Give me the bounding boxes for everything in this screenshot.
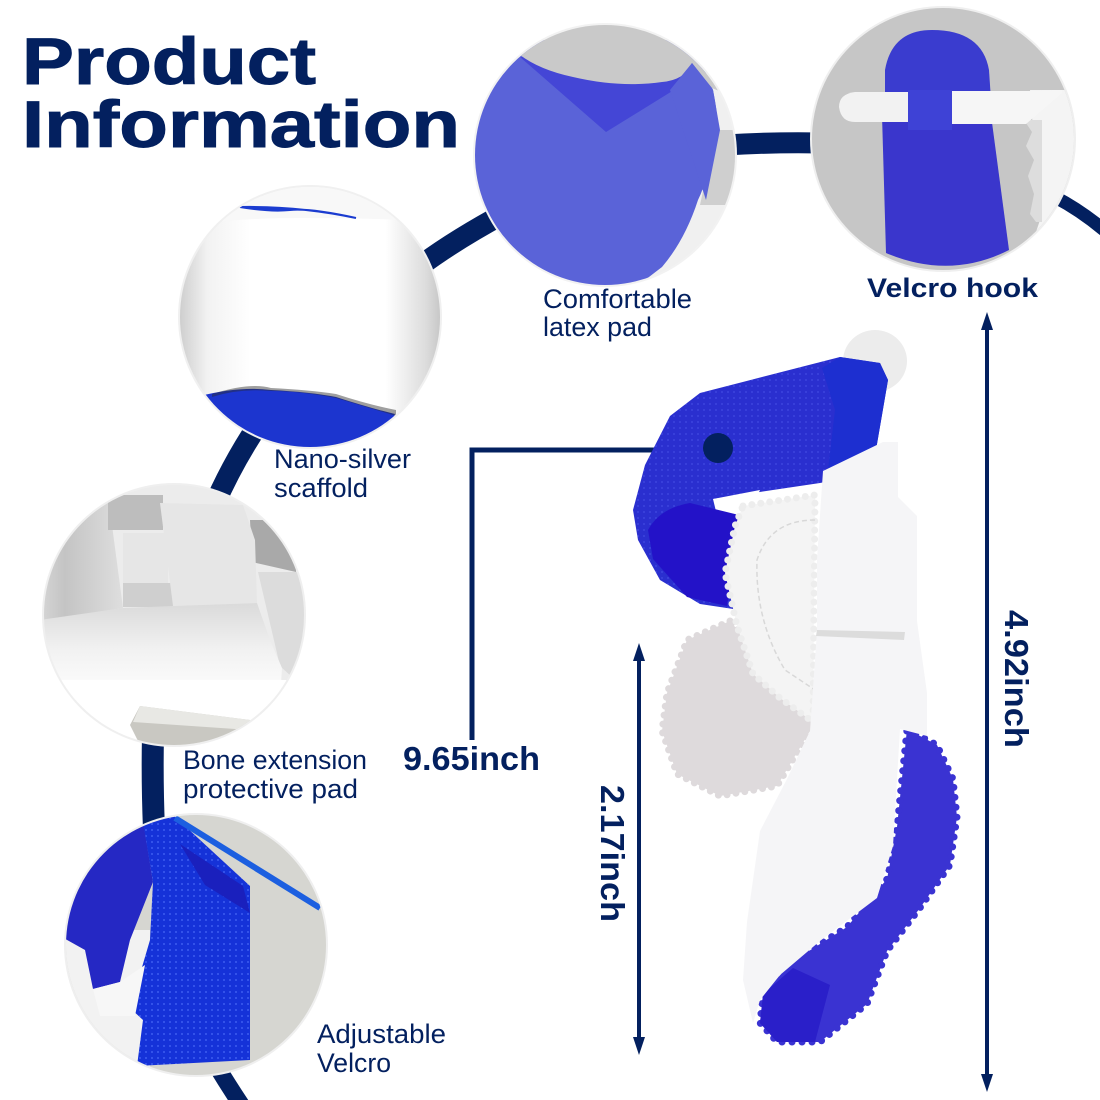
arrow: height: [633, 643, 645, 1055]
pad stitching: [757, 520, 815, 690]
title: Information: [22, 87, 460, 161]
white sliver: [713, 490, 760, 512]
label: bone extension protective pad: Bone extension: [183, 745, 367, 775]
panel: velcro hook: [805, 0, 1085, 280]
label: nano-silver scaffold: Nano-silver: [274, 444, 411, 474]
label: bone extension protective pad: protective pad: [183, 774, 358, 804]
label: nano-silver scaffold: [274, 444, 411, 503]
leader line: width dimension: [472, 450, 718, 740]
label: adjustable velcro: Adjustable: [317, 1019, 446, 1049]
front white pad: [725, 495, 815, 722]
dimension: 2.17inch: 2.17inch: [594, 785, 631, 922]
strap outside: [633, 357, 888, 610]
label: velcro hook: Velcro hook: [867, 273, 1038, 303]
arrow: total length: [981, 312, 993, 1092]
back grey pad: [662, 621, 813, 796]
label: nano-silver scaffold: scaffold: [274, 473, 368, 503]
dimension: 9.65inch: 9.65inch: [403, 740, 540, 777]
label: comfortable latex pad: latex pad: [543, 312, 652, 342]
white body: [743, 442, 927, 1023]
panel: bone extension protective pad: [40, 480, 310, 750]
velcro tab: [822, 357, 888, 478]
label: comfortable latex pad: Comfortable: [543, 284, 692, 314]
knob: [843, 330, 907, 392]
label: adjustable velcro: [317, 1019, 446, 1078]
callout dot: [703, 433, 733, 463]
panel: comfortable latex pad: [470, 15, 740, 290]
product illustration: [633, 330, 957, 1042]
label: bone extension protective pad: [183, 745, 367, 804]
panel: adjustable velcro: [60, 810, 330, 1080]
blue sole: [760, 729, 957, 1042]
label: adjustable velcro: Velcro: [317, 1048, 391, 1078]
strap inside: [648, 503, 743, 606]
dimension: 4.92inch: 4.92inch: [998, 610, 1035, 748]
title: [22, 24, 460, 161]
panel: nano-silver scaffold: [175, 180, 445, 455]
connecting arc: [153, 143, 1100, 1100]
title: Product: [22, 24, 316, 98]
label: comfortable latex pad: [543, 284, 692, 342]
